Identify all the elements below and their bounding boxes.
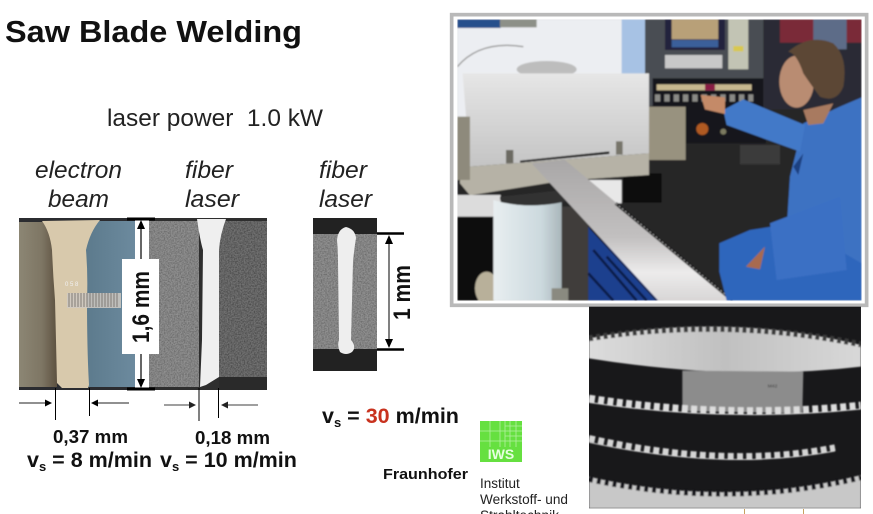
welded blade section <box>682 371 803 413</box>
label: 0,37 mm: 0,37 mm <box>53 426 128 447</box>
heading: electron beam: beam <box>48 186 109 213</box>
speed: 30 m/min: 30 m/min <box>366 404 459 428</box>
photo: saw blade coils <box>589 307 861 508</box>
dimension: 1,6 mm: 1,6 mm <box>128 271 155 343</box>
speed: 10 m/min: = 10 m/min <box>179 448 297 472</box>
text: Fraunhofer: Fraunhofer <box>383 467 468 483</box>
speed: 30 m/min: v <box>322 404 334 428</box>
panel: fiber laser weld micrograph <box>149 218 267 390</box>
photo frame <box>452 15 867 305</box>
heading: fiber laser, second sample: laser <box>319 186 373 213</box>
heading: fiber laser, second sample <box>319 157 373 213</box>
dimension: 1,6 mm <box>122 219 159 389</box>
speed: 10 m/min: s <box>172 459 179 474</box>
marks under saw blade photo <box>744 509 804 514</box>
panel: electron beam weld micrograph <box>19 218 135 390</box>
logo: Fraunhofer IWS: IWS <box>488 446 514 462</box>
centre opening of coil <box>589 326 861 373</box>
dimension: 0,37 mm arrows <box>19 388 129 420</box>
panel: second fiber laser micrograph <box>313 218 377 371</box>
heading: electron beam: electron <box>35 157 122 184</box>
workshop background <box>589 475 861 508</box>
speed: 30 m/min: = <box>341 404 366 428</box>
dimension: 0,18 mm arrows <box>164 388 258 421</box>
dimension: 1 mm: 1 mm <box>389 265 416 320</box>
bottom blade teeth <box>589 477 861 494</box>
speed: 8 m/min: = 8 m/min <box>46 448 152 472</box>
heading: fiber laser, second sample: fiber <box>319 157 368 184</box>
speed: 30 m/min: s <box>334 415 341 430</box>
lower blade teeth <box>589 438 835 456</box>
top blade edge <box>589 329 861 344</box>
text: institute name: Werkstoff- und <box>480 492 568 507</box>
photo: saw blade coils: M42 <box>768 384 778 390</box>
heading: fiber laser: fiber <box>185 157 234 184</box>
measuring scale <box>65 282 121 308</box>
heading: fiber laser <box>185 157 240 213</box>
heading: fiber laser: laser <box>185 186 240 213</box>
weld seam <box>42 220 100 388</box>
measuring scale: 0 5 8 <box>65 282 79 288</box>
photo scene <box>457 19 862 305</box>
label: 0,18 mm: 0,18 mm <box>195 427 270 448</box>
upper blade teeth <box>589 398 861 411</box>
dimension: 1 mm <box>377 234 416 350</box>
speed: 10 m/min: v <box>160 448 172 472</box>
logo: Fraunhofer IWS <box>480 421 522 462</box>
heading: electron beam <box>35 157 122 213</box>
text: institute name: Institut <box>480 476 520 491</box>
photo: operator at laser welding machine <box>452 15 867 305</box>
title: Saw Blade Welding <box>5 14 302 49</box>
laser power label: laser power 1.0 kW <box>107 105 323 132</box>
gap between micrographs <box>135 218 149 390</box>
text: institute name <box>480 476 568 514</box>
speed: 8 m/min: v <box>27 448 39 472</box>
speed: 8 m/min: s <box>39 459 46 474</box>
